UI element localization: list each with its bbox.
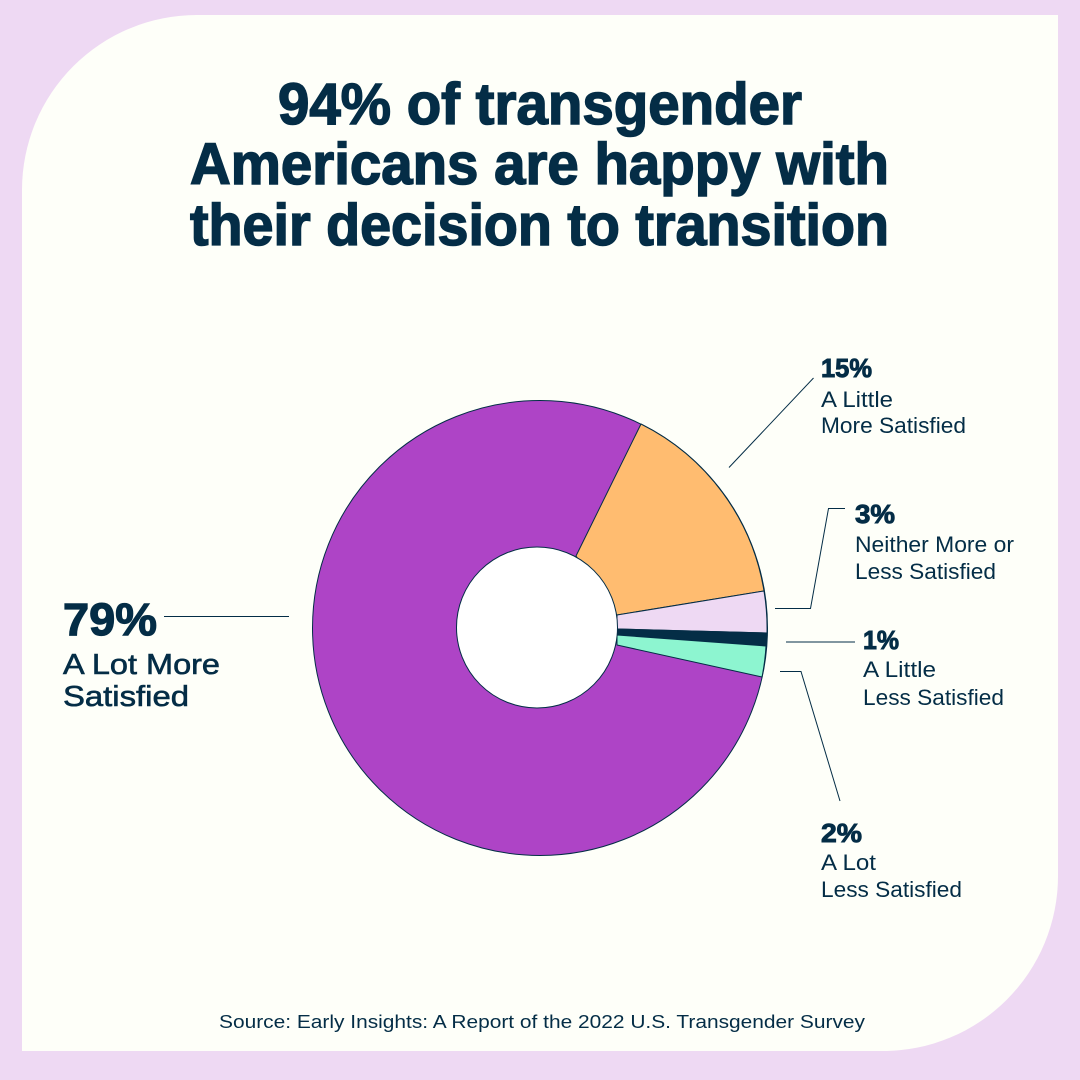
label: 1% [863, 625, 1004, 710]
label: 3%: Neither More or [855, 532, 1014, 557]
leader line: 3% [775, 508, 845, 608]
label: 1%: Less Satisfied [863, 685, 1004, 710]
slice: 79% a lot more satisfied [312, 400, 768, 856]
leader line: 1% [786, 641, 855, 643]
label: 2% [821, 818, 962, 902]
slice: 15% a little more satisfied [576, 424, 764, 615]
label: 1%: 1% [863, 625, 899, 655]
label: 15% [821, 353, 966, 438]
label: 15%: 15% [821, 353, 872, 383]
label: 2%: A Lot [821, 850, 876, 875]
leader line: 2% [780, 672, 840, 801]
slice: 2% a lot less satisfied [617, 635, 766, 677]
label: 79% [63, 594, 220, 713]
title: their decision to transition [190, 193, 889, 258]
label: 2%: Less Satisfied [821, 877, 962, 902]
label: 15%: A Little [821, 387, 893, 412]
label: 3% [855, 499, 1014, 584]
source note: Source: Early Insights: A Report of the 2022 U.S. Transgender Survey [219, 1011, 866, 1032]
label: 15%: More Satisfied [821, 413, 966, 438]
title [190, 72, 889, 258]
donut chart [312, 400, 768, 856]
leader line: 15% [729, 378, 814, 468]
slice: 3% neither [617, 591, 767, 633]
label: 79%: A Lot More [63, 649, 220, 681]
leader line: 79% [164, 616, 289, 618]
donut hole [456, 547, 618, 708]
label: 3%: Less Satisfied [855, 559, 996, 584]
label: 79%: 79% [63, 594, 157, 645]
label: 2%: 2% [821, 818, 862, 848]
title: 94% of transgender [278, 72, 802, 137]
slice: 1% a little less satisfied [617, 629, 767, 646]
label: 3%: 3% [855, 499, 895, 529]
label: 1%: A Little [863, 657, 936, 682]
label: 79%: Satisfied [63, 681, 189, 713]
title: Americans are happy with [190, 132, 889, 197]
